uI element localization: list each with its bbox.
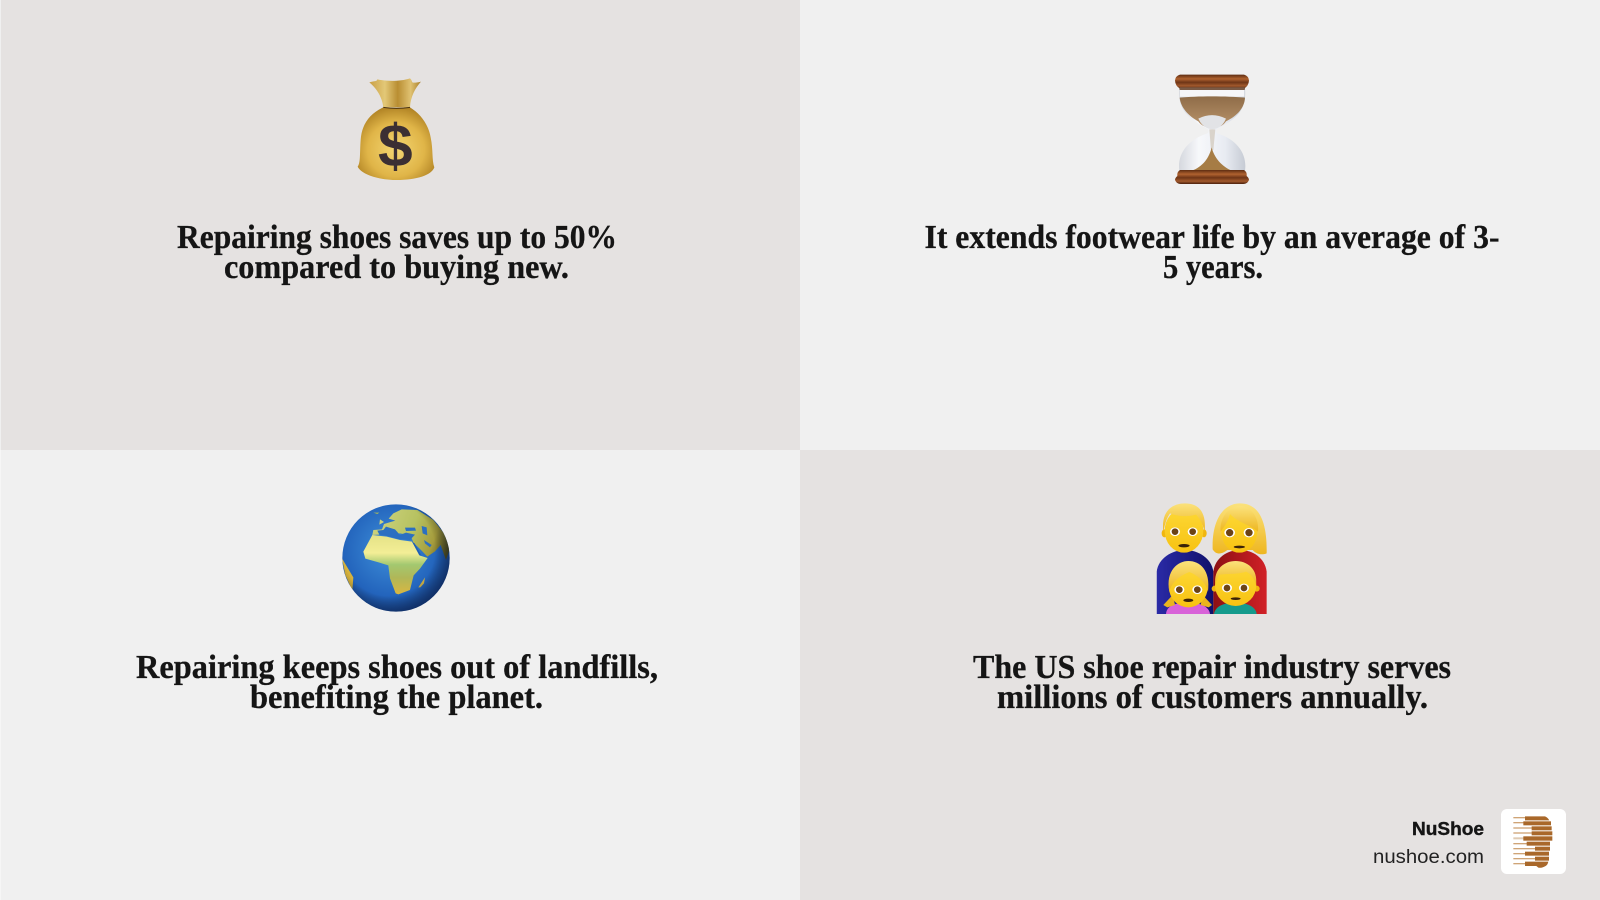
- icon: money bag: $: [378, 112, 413, 179]
- icon: globe: [342, 504, 451, 612]
- logo card: [1501, 809, 1566, 874]
- heading: landfill fact: Repairing keeps shoes out of landfills,: [136, 649, 658, 686]
- heading: lifespan fact: [924, 219, 1500, 286]
- panel: lifespan: [800, 0, 1600, 450]
- heading: customers fact: millions of customers annually.: [997, 679, 1428, 716]
- heading: lifespan fact: It extends footwear life by an average of 3-: [924, 219, 1500, 256]
- brand name: NuShoe: [1412, 818, 1484, 839]
- panel: customers: [800, 450, 1600, 900]
- heading: customers fact: The US shoe repair industry serves: [973, 649, 1451, 686]
- heading: savings fact: [177, 219, 617, 286]
- heading: customers fact: [973, 649, 1451, 716]
- heading: landfill fact: [136, 649, 658, 716]
- icon: money bag: [358, 78, 434, 180]
- heading: lifespan fact: 5 years.: [1163, 249, 1263, 286]
- heading: landfill fact: benefiting the planet.: [250, 679, 543, 716]
- brand: NuShoe footer: [1373, 809, 1566, 874]
- panel: planet: [136, 504, 657, 716]
- brand url: nushoe.com: [1373, 847, 1484, 868]
- icon: hourglass: [1175, 75, 1249, 184]
- icon: family: [1157, 503, 1267, 614]
- heading: savings fact: Repairing shoes saves up to 50%: [177, 219, 617, 256]
- panel: savings: [0, 0, 800, 450]
- heading: savings fact: compared to buying new.: [224, 249, 569, 286]
